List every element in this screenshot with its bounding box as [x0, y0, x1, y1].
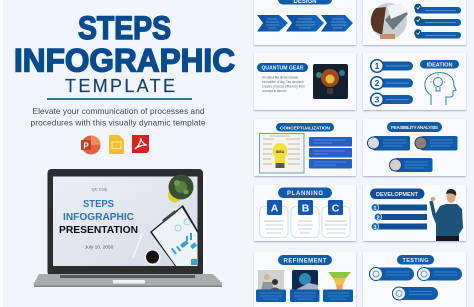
panel: testing	[363, 252, 466, 307]
bulb image: IDEA	[276, 150, 285, 154]
man	[431, 189, 463, 241]
laptop slide text: July 10, 2050	[85, 244, 114, 250]
title: TEMPLATE	[65, 76, 175, 96]
laptop base	[34, 274, 222, 286]
laptop slide text: PRESENTATION	[59, 224, 138, 236]
subtitle text: Elevate your communication of processes and	[32, 106, 205, 116]
heading pill	[397, 255, 434, 264]
laptop screen	[53, 176, 198, 266]
numbered rows: 2	[375, 78, 380, 88]
heading pill	[370, 188, 424, 199]
laptop slide text: INFOGRAPHIC	[63, 211, 134, 223]
panel: development	[363, 185, 466, 241]
check rows	[414, 4, 461, 38]
body text: creates process efficiency from	[262, 84, 305, 88]
subtitle text	[30, 106, 206, 128]
panel: checklist	[363, 0, 466, 45]
title underline	[47, 98, 192, 100]
laptop slide text: STEPS	[83, 198, 114, 210]
panel: refinement: REFINEMENT	[284, 258, 327, 264]
panel: ideation	[363, 53, 466, 110]
blue rows	[309, 137, 352, 168]
panel: conceptualization: CONCEPTUALIZATION	[280, 125, 331, 131]
body text: An object like above reveals	[262, 76, 298, 80]
numbered rows: 3	[373, 225, 377, 231]
numbered rows: 2	[376, 215, 380, 221]
numbered rows: 3	[375, 94, 380, 104]
clipboard	[150, 205, 198, 266]
item pills	[369, 268, 462, 300]
icon: Google Slides	[109, 135, 124, 154]
heading pill	[278, 255, 332, 265]
heading pill	[276, 123, 334, 132]
bulb image	[313, 64, 348, 99]
laptop slide text	[59, 186, 138, 250]
heading pill	[278, 188, 332, 198]
panel: refinement	[254, 252, 356, 307]
ABC cards	[260, 200, 350, 238]
panel: conceptualization	[254, 119, 356, 176]
panel: quantum gear: QUANTUM GEAR	[262, 66, 304, 72]
body text: concept to launch.	[262, 89, 287, 93]
numbered rows	[371, 60, 413, 106]
body text	[262, 76, 305, 93]
plant	[168, 174, 194, 202]
panel: development: DEVELOPMENT	[376, 192, 419, 198]
title: STEPS	[78, 10, 171, 46]
photo: people	[258, 270, 284, 290]
chevrons	[257, 15, 353, 32]
coffee cup	[144, 250, 160, 266]
numbered rows: 1	[375, 61, 380, 71]
panel: planning	[254, 185, 356, 241]
subtitle text: procedures with this visually dynamic template	[30, 118, 206, 128]
panel: testing: TESTING	[402, 258, 428, 264]
icon: PowerPoint: P	[83, 142, 89, 150]
heading pill	[257, 63, 308, 72]
ABC cards: B	[302, 202, 310, 214]
pen	[133, 234, 142, 258]
body text: innovation of tag. Our structure	[262, 80, 304, 84]
title: INFOGRAPHIC	[14, 42, 235, 78]
item cards	[368, 136, 458, 172]
numbered rows: 1	[373, 206, 377, 212]
panel: quantum gear	[254, 53, 356, 110]
photo: tech hand	[292, 270, 318, 291]
photo circle	[371, 3, 408, 39]
funnel	[328, 272, 351, 290]
ABC cards: C	[332, 202, 340, 214]
laptop	[34, 169, 222, 287]
panel: ideation: IDEATION	[427, 62, 452, 68]
icon: PowerPoint	[81, 136, 100, 154]
icon: head with bulb	[425, 73, 456, 105]
panel: planning: PLANNING	[287, 191, 323, 197]
numbered rows	[371, 204, 427, 231]
laptop slide text: QC Corp	[92, 186, 108, 192]
title	[14, 10, 235, 96]
caption cards	[256, 290, 353, 302]
heading pill	[278, 0, 332, 4]
panel: feasibility analysis: FEASIBILITY ANALYSIS	[391, 125, 439, 131]
heading pill	[420, 60, 459, 68]
icon: PDF	[132, 135, 149, 153]
ABC cards: A	[271, 202, 279, 214]
heading pill	[387, 122, 442, 132]
panel: feasibility analysis	[363, 119, 466, 176]
panel: design	[254, 0, 356, 45]
